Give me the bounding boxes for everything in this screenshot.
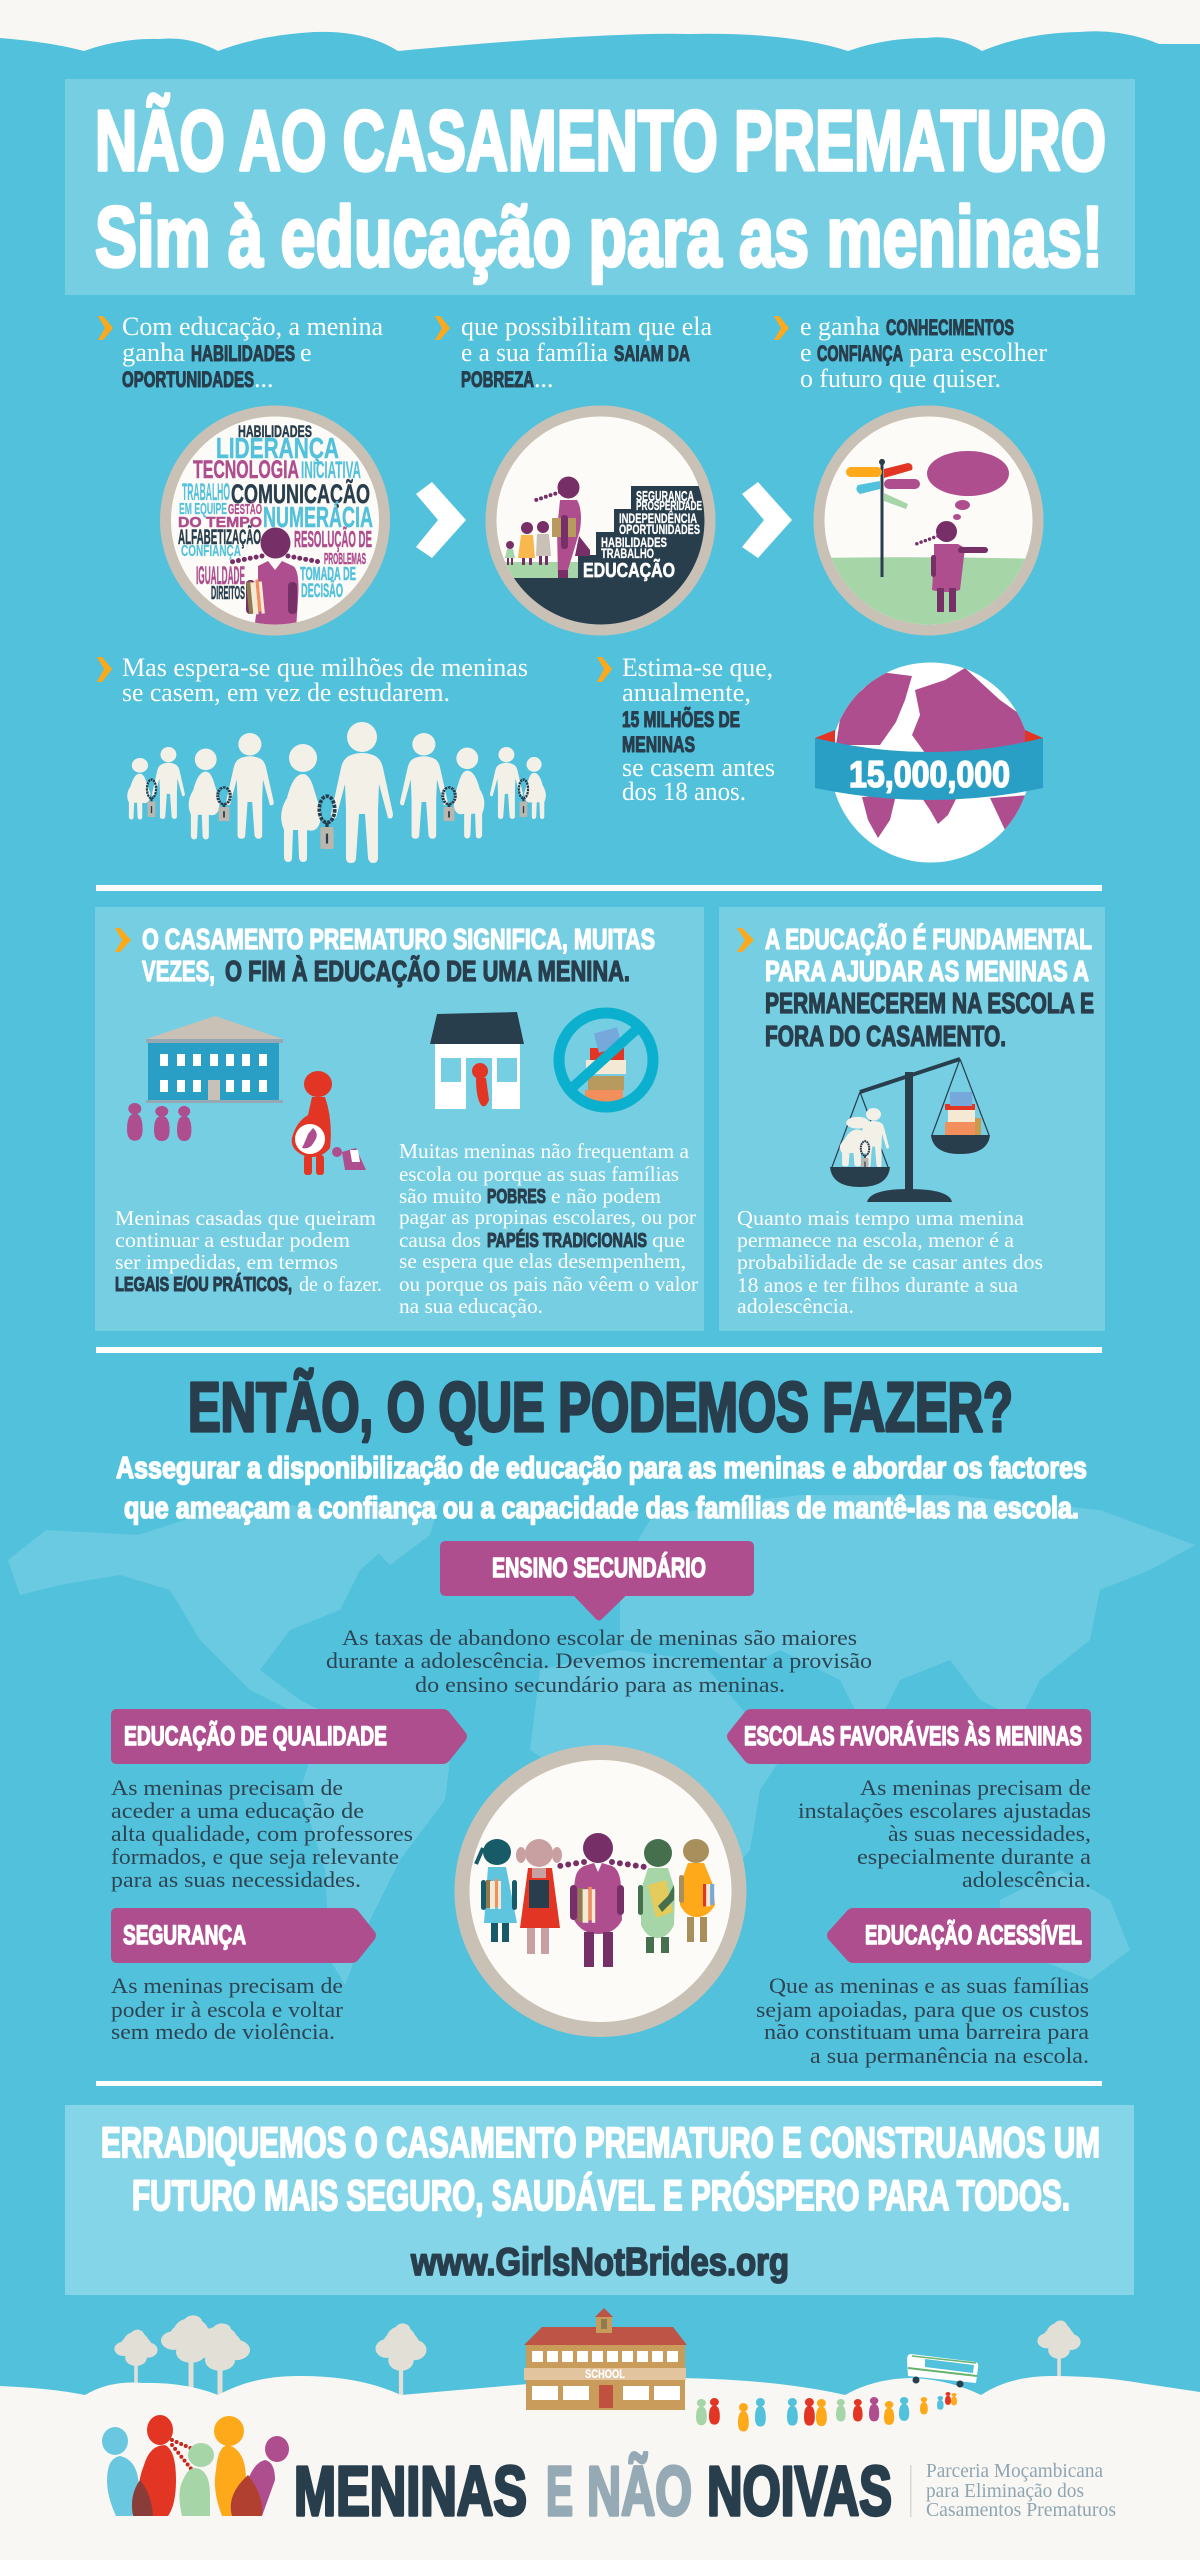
line of small children bbox=[696, 2392, 957, 2432]
icon: girl with books bbox=[231, 528, 320, 630]
text: expected marriages: Mas espera-se que milhões de meninas bbox=[122, 653, 528, 682]
icon: thought bubble bbox=[927, 451, 1009, 520]
icon: signpost bbox=[846, 459, 920, 577]
panel heading: PARA AJUDAR AS MENINAS A bbox=[765, 956, 1089, 988]
callout: secondary education: ENSINO SECUNDÁRIO bbox=[492, 1552, 706, 1583]
text: fifteen million: anualmente, bbox=[622, 678, 751, 707]
text: married girls: continuar a estudar podem bbox=[115, 1228, 350, 1252]
logo: partnership text: para Eliminação dos bbox=[926, 2480, 1084, 2502]
text: fifteen million: Estima-se que, bbox=[622, 653, 773, 682]
logo: wordmark bbox=[294, 2452, 892, 2530]
text: many girls: causa dos bbox=[399, 1228, 481, 1252]
intro text column 1: ganha bbox=[122, 338, 185, 367]
panel: end of education bbox=[95, 907, 704, 1331]
text: affordable education: não constituam uma barreira para bbox=[764, 2019, 1089, 2044]
text: many girls: PAPÉIS TRADICIONAIS bbox=[487, 1229, 647, 1252]
tag: quality education: EDUCAÇÃO DE QUALIDADE bbox=[124, 1720, 387, 1751]
word cloud: EM EQUIPE bbox=[179, 501, 227, 518]
icon: school bbox=[146, 1016, 283, 1103]
panel: call to action bbox=[65, 2105, 1134, 2295]
intro text column 2 bbox=[435, 312, 712, 393]
intro text column 3: CONFIANÇA bbox=[817, 341, 903, 366]
panel heading: FORA DO CASAMENTO. bbox=[765, 1021, 1006, 1053]
icon: girl pointing bbox=[916, 521, 988, 612]
arrow: chevron 1 bbox=[416, 482, 466, 558]
counter: 15,000,000 bbox=[849, 754, 1010, 795]
section subheading bbox=[116, 1450, 1087, 1525]
word cloud: GESTÃO bbox=[228, 500, 262, 518]
text: girl friendly schools: As meninas precisam de bbox=[860, 1775, 1091, 1800]
word cloud: TECNOLOGIA bbox=[193, 456, 299, 484]
text: many girls: POBRES bbox=[487, 1186, 546, 1208]
intro text column 1: Com educação, a menina bbox=[122, 312, 383, 341]
text: married girls: de o fazer. bbox=[299, 1272, 382, 1296]
stair words: TRABALHO bbox=[601, 545, 654, 561]
panel heading bbox=[142, 924, 655, 988]
text: many girls: na sua educação. bbox=[399, 1294, 543, 1318]
text: longer in school: adolescência. bbox=[737, 1294, 854, 1318]
text: safety: As meninas precisam de bbox=[111, 1973, 343, 1998]
icon: family bbox=[505, 521, 551, 565]
icon: scales bbox=[830, 1059, 990, 1202]
intro text column 2: que possibilitam que ela bbox=[461, 312, 712, 341]
text: many girls: que bbox=[652, 1228, 685, 1252]
intro text column 3: o futuro que quiser. bbox=[800, 364, 1001, 393]
intro text column 2: SAIAM DA bbox=[614, 341, 690, 366]
text: secondary education bbox=[326, 1625, 872, 1697]
icon: school bus bbox=[907, 2354, 978, 2388]
text: longer in school: Quanto mais tempo uma menina bbox=[737, 1206, 1025, 1230]
intro text column 2: e a sua família bbox=[461, 338, 608, 367]
logo: wordmark: NOIVAS bbox=[707, 2452, 892, 2530]
text: affordable education: sejam apoiadas, para que os custos bbox=[756, 1997, 1089, 2022]
word cloud: TOMADA DE bbox=[300, 564, 356, 584]
trees bbox=[114, 2315, 1081, 2418]
text: girl friendly schools: especialmente durante a bbox=[857, 1844, 1091, 1869]
text: married girls: LEGAIS E/OU PRÁTICOS, bbox=[115, 1273, 292, 1296]
text: affordable education: a sua permanência na escola. bbox=[810, 2043, 1089, 2068]
girl 3 bbox=[553, 1833, 645, 1967]
text: quality education: formados, e que seja relevante bbox=[111, 1844, 399, 1869]
girl 2 bbox=[516, 1839, 562, 1954]
text: quality education: para as suas necessidades. bbox=[111, 1867, 361, 1892]
circle: five girls bbox=[454, 1745, 746, 2037]
tag: safety: SEGURANÇA bbox=[123, 1920, 246, 1950]
text: safety: sem medo de violência. bbox=[111, 2019, 335, 2044]
globe with ribbon bbox=[815, 662, 1043, 862]
text: secondary education: As taxas de abandono escolar de meninas são maiores bbox=[342, 1625, 857, 1650]
logo: partnership text bbox=[926, 2460, 1116, 2521]
icon: no books bbox=[559, 1013, 653, 1107]
cream cloud band top bbox=[0, 0, 1200, 51]
intro text column 3: para escolher bbox=[909, 338, 1047, 367]
arrow: chevron 2 bbox=[742, 482, 792, 558]
panel heading: O FIM À EDUCAÇÃO DE UMA MENINA. bbox=[225, 954, 630, 988]
panel heading: O CASAMENTO PREMATURO SIGNIFICA, MUITAS bbox=[142, 924, 655, 956]
intro text column 3: e ganha bbox=[800, 312, 880, 341]
intro text column 1 bbox=[98, 312, 383, 393]
text: many girls: Muitas meninas não frequentam a bbox=[399, 1139, 690, 1163]
text: quality education: aceder a uma educação de bbox=[111, 1798, 364, 1823]
logo: partnership text: Parceria Moçambicana bbox=[926, 2460, 1103, 2482]
text: longer in school: permanece na escola, menor é a bbox=[737, 1228, 1015, 1252]
text: affordable education bbox=[756, 1973, 1089, 2068]
logo: wordmark: NÃO bbox=[587, 2452, 692, 2530]
circle: skills word cloud bbox=[160, 406, 390, 636]
tag: girl friendly schools bbox=[727, 1709, 1091, 1764]
stair words: INDEPENDÊNCIA bbox=[619, 509, 697, 526]
icon: girl climbing bbox=[536, 476, 590, 578]
text: safety: poder ir à escola e voltar bbox=[111, 1997, 344, 2022]
stair words: HABILIDADES bbox=[601, 534, 667, 550]
icon: school building bbox=[524, 2308, 687, 2410]
logo: wordmark: E bbox=[546, 2452, 573, 2530]
word cloud: DECISÃO bbox=[301, 580, 343, 602]
text: affordable education: Que as meninas e as suas famílias bbox=[769, 1973, 1089, 1998]
call to action text bbox=[101, 2119, 1100, 2220]
text: many girls: são muito bbox=[399, 1184, 482, 1208]
text: many girls: e não podem bbox=[551, 1184, 661, 1208]
text: longer in school: 18 anos e ter filhos durante a sua bbox=[737, 1273, 1019, 1297]
word cloud: ALFABETIZAÇÃO bbox=[178, 526, 261, 549]
title panel bbox=[65, 79, 1135, 295]
text: secondary education: do ensino secundário para as meninas. bbox=[415, 1672, 785, 1697]
word cloud: IGUALDADE bbox=[196, 562, 245, 590]
logo: wordmark: MENINAS bbox=[294, 2452, 527, 2530]
word cloud bbox=[178, 422, 373, 603]
stair words: PROSPERIDADE bbox=[636, 498, 702, 513]
website: www.GirlsNotBrides.org bbox=[410, 2241, 789, 2284]
world map background bbox=[8, 1495, 1195, 1985]
circle: skills word cloud: PROBLEMAS bbox=[324, 551, 366, 568]
text: secondary education: durante a adolescência. Devemos incrementar a provisão bbox=[326, 1648, 872, 1673]
icon: row of girls and men with locks bbox=[127, 722, 546, 863]
text: many girls: se espera que elas desempenhem, bbox=[399, 1249, 686, 1273]
girl 4 bbox=[638, 1839, 675, 1953]
word cloud: LIDERANÇA bbox=[216, 433, 339, 465]
text: many girls: escola ou porque as suas famílias bbox=[399, 1162, 679, 1186]
tag: affordable education: EDUCAÇÃO ACESSÍVEL bbox=[865, 1919, 1082, 1950]
intro text column 2: ... bbox=[534, 364, 554, 393]
intro text column 1: e bbox=[300, 338, 312, 367]
word cloud: DIREITOS bbox=[211, 583, 245, 603]
icon: pregnant girl and baby bbox=[292, 1071, 366, 1175]
text: girl friendly schools: adolescência. bbox=[962, 1867, 1091, 1892]
logo: partnership text: Casamentos Prematuros bbox=[926, 2499, 1116, 2521]
text: married girls: Meninas casadas que queiram bbox=[115, 1206, 376, 1230]
icon: school building: SCHOOL bbox=[585, 2367, 625, 2381]
intro text column 2: POBREZA bbox=[461, 367, 534, 392]
intro text column 1: OPORTUNIDADES bbox=[122, 367, 254, 392]
intro text column 1: HABILIDADES bbox=[191, 341, 295, 366]
stair words bbox=[583, 488, 702, 582]
stair words: SEGURANÇA bbox=[636, 488, 694, 505]
text: expected marriages bbox=[97, 653, 528, 707]
text: married girls bbox=[115, 1206, 382, 1296]
text: girl friendly schools: instalações escolares ajustadas bbox=[798, 1798, 1091, 1823]
text: fifteen million bbox=[597, 653, 775, 806]
text: many girls: pagar as propinas escolares, ou por bbox=[399, 1205, 696, 1229]
text: fifteen million: MENINAS bbox=[622, 732, 695, 757]
books on the pan bbox=[945, 1092, 981, 1135]
word cloud: COMUNICAÇÃO bbox=[231, 478, 370, 509]
word cloud: CONFIANÇA bbox=[181, 543, 241, 560]
tag: safety bbox=[111, 1908, 376, 1963]
intro text column 1: ... bbox=[254, 364, 274, 393]
text: longer in school: probabilidade de se casar antes dos bbox=[737, 1250, 1043, 1274]
text: quality education: alta qualidade, com professores bbox=[111, 1821, 413, 1846]
text: fifteen million: 15 MILHÕES DE bbox=[622, 707, 740, 732]
text: expected marriages: se casem, em vez de estudarem. bbox=[122, 678, 450, 707]
girl 5 bbox=[679, 1839, 715, 1942]
word cloud: DO TEMPO bbox=[178, 514, 262, 531]
icon: three purple girls bbox=[127, 1103, 191, 1141]
icon: house with girl bbox=[430, 1012, 524, 1109]
tag: affordable education bbox=[827, 1908, 1091, 1963]
text: many girls: ou porque os pais não vêem o valor bbox=[399, 1272, 698, 1296]
girl 1 bbox=[476, 1839, 517, 1942]
panel: education is fundamental bbox=[719, 907, 1105, 1331]
text: safety bbox=[111, 1973, 344, 2044]
text: quality education bbox=[111, 1775, 413, 1892]
text: longer in school bbox=[737, 1206, 1043, 1318]
text: girl friendly schools bbox=[798, 1775, 1091, 1892]
panel heading bbox=[765, 922, 1094, 1053]
couple on the pan bbox=[840, 1108, 889, 1170]
stair words: OPORTUNIDADES bbox=[619, 521, 700, 537]
text: fifteen million: dos 18 anos. bbox=[622, 777, 746, 806]
stair words: EDUCAÇÃO bbox=[583, 559, 675, 582]
text: quality education: As meninas precisam de bbox=[111, 1775, 343, 1800]
word cloud: NUMERÁCIA bbox=[263, 500, 373, 534]
intro text column 3: e bbox=[800, 338, 812, 367]
tag: quality education bbox=[111, 1709, 467, 1764]
stairs bbox=[514, 486, 704, 624]
circle: education stairs bbox=[486, 406, 716, 640]
text: fifteen million: se casem antes bbox=[622, 753, 775, 782]
text: many girls bbox=[399, 1139, 698, 1318]
intro text column 3: CONHECIMENTOS bbox=[886, 315, 1014, 340]
logo: girls silhouettes bbox=[102, 2415, 289, 2516]
callout: secondary education bbox=[440, 1541, 754, 1620]
circle: future choice bbox=[814, 406, 1044, 640]
cream hills bottom bbox=[0, 2375, 1200, 2560]
word cloud: HABILIDADES bbox=[238, 422, 312, 441]
text: married girls: ser impedidas, em termos bbox=[115, 1250, 338, 1274]
intro text column 3 bbox=[774, 312, 1047, 393]
panel heading: VEZES, bbox=[142, 956, 215, 988]
text: girl friendly schools: às suas necessidades, bbox=[888, 1821, 1091, 1846]
circle: skills word cloud: RESOLUÇÃO DE bbox=[294, 525, 372, 552]
word cloud: INICIATIVA bbox=[301, 457, 361, 484]
word cloud: TRABALHO bbox=[182, 479, 230, 506]
